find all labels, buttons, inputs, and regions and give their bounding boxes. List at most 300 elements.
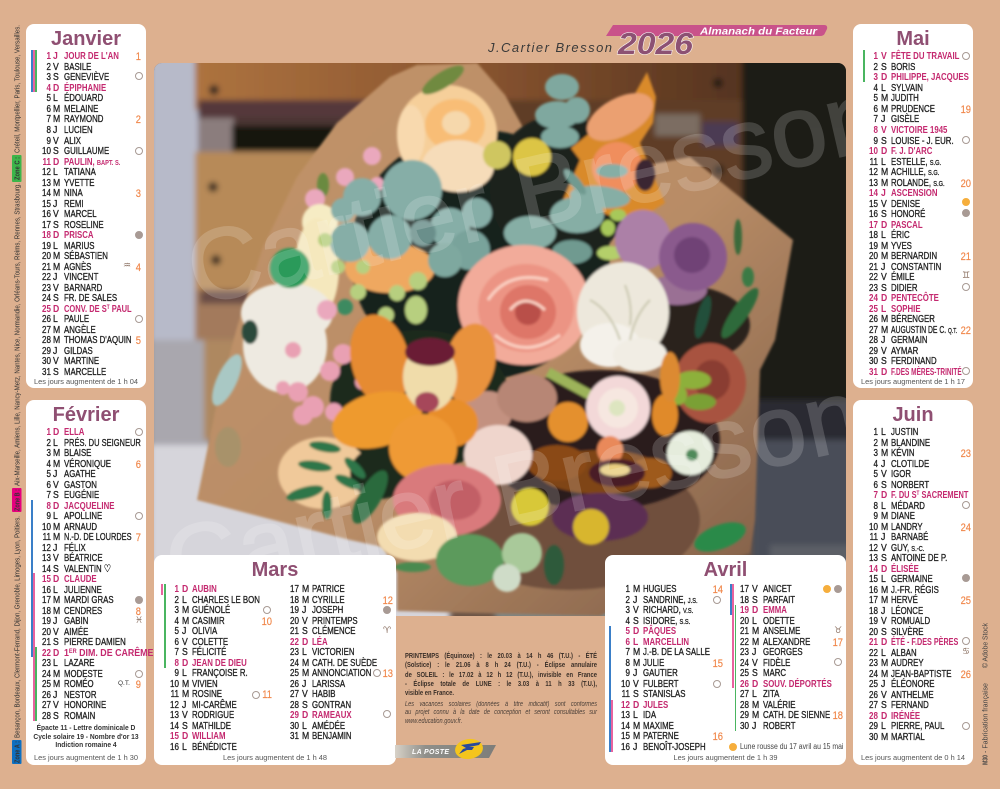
day list: Juin: NORBERT bbox=[891, 480, 929, 491]
day list: Février: ARNAUD bbox=[64, 522, 97, 533]
day list: Janvier: AGNÈS bbox=[64, 262, 91, 273]
day list: Février: M bbox=[53, 532, 60, 543]
day list: Juin: 23 bbox=[961, 448, 971, 460]
day list: Mars first column: 1 bbox=[175, 584, 179, 595]
day list: Avril second column: M bbox=[752, 637, 759, 648]
heading: Juin: Juin bbox=[892, 404, 934, 426]
day list: Février: J bbox=[53, 469, 57, 480]
day list: Février: S bbox=[53, 711, 59, 722]
day list: Avril second column: ANICET bbox=[763, 584, 792, 595]
green stem bbox=[548, 372, 590, 395]
dusty roses bbox=[462, 391, 512, 435]
day list: Mars second column: 12 bbox=[383, 595, 393, 607]
day list: Mars first column: MI-CARÊME bbox=[192, 700, 237, 711]
day list: Avril second column: 19 bbox=[740, 605, 749, 616]
orange lily bbox=[563, 72, 665, 223]
day list: Juin: 24 bbox=[869, 669, 878, 680]
text block: seasons and eclipses: PRINTEMPS (Équinoxe) : le 20.03 à 14 h 46 (T.U.) - ÉTÉ bbox=[404, 651, 596, 660]
day list: Mars first column: M bbox=[182, 689, 189, 700]
icon: new moon bbox=[135, 231, 143, 239]
purple low bbox=[552, 493, 648, 541]
day list: Mai: 15 bbox=[869, 199, 878, 210]
day list: Février: L bbox=[53, 585, 58, 596]
day list: Mai: 23 bbox=[869, 283, 878, 294]
almanac facts: Cycle solaire 19 - Nombre d'or 13 bbox=[33, 732, 139, 741]
day list: Juin: 10 bbox=[869, 522, 878, 533]
day list: Février: M bbox=[53, 522, 60, 533]
day list: Avril second column: J bbox=[752, 721, 756, 732]
green buds bbox=[318, 233, 427, 324]
day list: Février: J bbox=[53, 616, 57, 627]
day list: Mai: FERDINAND bbox=[891, 356, 937, 367]
day list: Juin: M bbox=[881, 669, 888, 680]
day list: Mars second column: 24 bbox=[290, 658, 299, 669]
day list: Février: M bbox=[53, 459, 60, 470]
day list: Avril second column bbox=[740, 584, 843, 732]
day list: Juin: V bbox=[881, 469, 887, 480]
day list: Mai: BORIS bbox=[891, 62, 915, 73]
day list: Janvier: NINA bbox=[64, 188, 82, 199]
day list: Mai: J bbox=[881, 335, 885, 346]
icon: new moon bbox=[834, 585, 842, 593]
day list: Mars first column: V bbox=[182, 710, 188, 721]
day list: Février: V bbox=[53, 553, 59, 564]
day list: Mai bbox=[869, 50, 971, 378]
day list: Mars first column: 9 bbox=[175, 668, 179, 679]
day list: Février: J bbox=[53, 543, 57, 554]
holiday bar bbox=[863, 50, 864, 82]
day list: Mai: M bbox=[881, 314, 888, 325]
purple rose bbox=[615, 210, 671, 270]
day list: Janvier: PRISCA bbox=[64, 230, 93, 241]
day list: Mars second column: LÉA bbox=[312, 637, 328, 648]
day list: Mars second column: 19 bbox=[290, 605, 299, 616]
day list: Avril first column: J bbox=[633, 742, 637, 753]
day list: Février: ROMÉO bbox=[64, 679, 93, 690]
day list: Janvier: V bbox=[53, 62, 59, 73]
day list: Mai: 1 bbox=[874, 51, 878, 62]
day list: Janvier: D bbox=[53, 304, 59, 315]
day list: Février: ROMAIN bbox=[64, 711, 95, 722]
day list: Mars first column: JEAN DE DIEU bbox=[192, 658, 247, 669]
green cluster lower bbox=[436, 534, 504, 586]
legend: red moon bbox=[729, 742, 843, 751]
day list: Mars first column: S bbox=[182, 647, 188, 658]
day list: Mars second column: L bbox=[302, 647, 307, 658]
day list: Février: 7 bbox=[136, 532, 141, 544]
day list: Février: S bbox=[53, 564, 59, 575]
day list: Mai: M bbox=[881, 178, 888, 189]
day list: Mars second column: S bbox=[302, 626, 308, 637]
day list: Janvier: SÉBASTIEN bbox=[64, 251, 107, 262]
day list: Janvier: THOMAS D'AQUIN bbox=[64, 335, 131, 346]
day list: Mars second column: AMÉDÉE bbox=[312, 721, 345, 732]
day list: Février: 11 bbox=[42, 532, 50, 543]
day list: Février: JULIENNE bbox=[64, 585, 101, 596]
day list: Avril second column: SOUV. DÉPORTÉS bbox=[763, 679, 832, 690]
day list: Février: 6 bbox=[136, 459, 141, 471]
day list: Avril second column: D bbox=[752, 679, 758, 690]
day list: Mai: SOPHIE bbox=[891, 304, 921, 315]
day list: Mai: L bbox=[881, 83, 886, 94]
day list: Mars second column: 17 bbox=[290, 584, 299, 595]
day list: Mai: 20 bbox=[869, 251, 878, 262]
day list: Janvier: S bbox=[53, 72, 59, 83]
day list: Janvier: BASILE bbox=[64, 62, 91, 73]
day list: Juin: JEAN-BAPTISTE bbox=[891, 669, 951, 680]
icon: moon bbox=[135, 670, 143, 678]
day list: Juin: 27 bbox=[869, 700, 878, 711]
day list: Juin: JUSTIN bbox=[891, 427, 918, 438]
day list: Avril second column: 28 bbox=[740, 700, 749, 711]
day list: Mars first column bbox=[170, 584, 272, 753]
day list: Janvier: J bbox=[53, 346, 57, 357]
day list: Janvier: S bbox=[53, 146, 59, 157]
heading: Janvier: Janvier bbox=[51, 28, 121, 50]
day list: Mars second column: CYRILLE bbox=[312, 595, 345, 606]
day list: Janvier: 16 bbox=[42, 209, 50, 220]
day list: Mars second column: D bbox=[302, 637, 308, 648]
left white flowers bbox=[302, 204, 338, 240]
day list: Avril first column: 5 bbox=[626, 626, 630, 637]
day list: Mars first column: BÉNÉDICTE bbox=[192, 742, 237, 753]
day list: Mai: YVES bbox=[891, 241, 912, 252]
day list: Mars second column: 13 bbox=[383, 668, 393, 680]
icon: moon bbox=[713, 680, 721, 688]
day list: Mars first column: GUÉNOLÉ bbox=[192, 605, 230, 616]
banner ribbon bbox=[606, 25, 827, 38]
day list: Avril second column: 18 bbox=[833, 710, 843, 722]
day list: Juin: GUY, S.-C. bbox=[891, 543, 924, 554]
day list: Avril first column: PATERNE bbox=[643, 731, 679, 742]
day list: Juin: V bbox=[881, 690, 887, 701]
day list: Avril first column: 11 bbox=[622, 689, 630, 700]
day list: Mai: M bbox=[881, 241, 888, 252]
orange petals right bbox=[548, 402, 588, 442]
day list: Mai: S bbox=[881, 62, 887, 73]
day list: Avril second column: 27 bbox=[740, 689, 749, 700]
day list: Janvier: 24 bbox=[42, 293, 50, 304]
day list: Avril first column: JULES bbox=[643, 700, 668, 711]
day list: Mars first column: 12 bbox=[170, 700, 179, 711]
side text: school holiday zones: Zone A : bbox=[12, 741, 22, 763]
icon: zodiac: ♋ bbox=[962, 647, 970, 657]
day list: Mars first column: M bbox=[182, 679, 189, 690]
day list: Janvier: D bbox=[53, 157, 59, 168]
day list: Février: L bbox=[53, 658, 58, 669]
day list: Mars second column: HABIB bbox=[312, 689, 335, 700]
day list: Juin: 1 bbox=[874, 427, 878, 438]
icon: red moon dot bbox=[823, 585, 831, 593]
day list: Janvier: 3 bbox=[136, 188, 141, 200]
day list: Avril first column: 14 bbox=[621, 721, 630, 732]
day list: Février: V bbox=[53, 480, 59, 491]
day list: Juin: F. DU ST SACREMENT bbox=[891, 490, 968, 501]
green top leaf bbox=[421, 64, 465, 96]
day list: Mars first column: J bbox=[182, 700, 186, 711]
day list: Juin: MÉDARD bbox=[891, 501, 925, 512]
day list: Mai: ROLANDE, S.G. bbox=[891, 178, 945, 189]
day list: Mai: S bbox=[881, 356, 887, 367]
day list: Juin: 9 bbox=[874, 511, 878, 522]
icon: moon bbox=[713, 596, 721, 604]
watermark bbox=[192, 100, 846, 550]
day list: Mai: GERMAIN bbox=[891, 335, 928, 346]
small leaf on paper bbox=[692, 520, 748, 554]
day list: Février: PRÉS. DU SEIGNEUR bbox=[64, 438, 140, 449]
day list: Mars first column: D bbox=[182, 584, 188, 595]
day list: Mars second column: 27 bbox=[290, 689, 299, 700]
day list: Janvier: V bbox=[53, 136, 59, 147]
day list: Juin: PIERRE, PAUL bbox=[891, 721, 944, 732]
day list: Mai: AYMAR bbox=[891, 346, 918, 357]
side text: credits bbox=[980, 623, 990, 765]
day list: Mars first column: L bbox=[182, 742, 187, 753]
day list: Avril second column: 26 bbox=[740, 679, 749, 690]
footer note: Les jours augmentent de 1 h 04 bbox=[34, 377, 138, 386]
day list: Mars first column: 6 bbox=[175, 637, 179, 648]
day list: Janvier: 5 bbox=[46, 93, 50, 104]
day list: Juin: 6 bbox=[874, 480, 878, 491]
day list: Avril second column: 21 bbox=[740, 626, 749, 637]
day list: Février: L bbox=[53, 438, 58, 449]
day list: Juin: 18 bbox=[869, 606, 878, 617]
day list: Juin: 8 bbox=[874, 501, 878, 512]
day list: Avril first column: FULBERT bbox=[643, 679, 679, 690]
day list: Janvier: J bbox=[53, 125, 57, 136]
day list: Mars first column: 2 bbox=[175, 595, 179, 606]
day list: Février: CLAUDE bbox=[64, 574, 96, 585]
day list: Février: 20 bbox=[42, 627, 50, 638]
day list: Janvier: V bbox=[53, 283, 59, 294]
day list: Mai: M bbox=[881, 167, 888, 178]
day list: Mai: 25 bbox=[869, 304, 878, 315]
day list: Mai: L bbox=[881, 304, 886, 315]
day list: Janvier: D bbox=[53, 83, 59, 94]
day list: Mars first column: WILLIAM bbox=[192, 731, 225, 742]
text block: school holidays note: www.education.gouv.fr. bbox=[404, 718, 462, 725]
day list: Février: L bbox=[53, 511, 58, 522]
day list: Mars first column: M bbox=[182, 605, 189, 616]
text block: seasons and eclipses: de SOLEIL : le 17.02 à 12 h 12 (T.U.), invisible en France bbox=[404, 670, 596, 679]
day list: Février: 23 bbox=[42, 658, 50, 669]
day list: Mars second column: CATH. DE SUÈDE bbox=[312, 658, 377, 669]
day list: Juin: DIANE bbox=[891, 511, 915, 522]
day list: Mai: ÉMILE bbox=[891, 272, 914, 283]
day list: Mars first column: L bbox=[182, 668, 187, 679]
day list: Juin: J bbox=[881, 679, 885, 690]
day list: Mai: ÉRIC bbox=[891, 230, 910, 241]
day list: Mars second column: M bbox=[302, 658, 309, 669]
day list: Mai: PHILIPPE, JACQUES bbox=[891, 72, 969, 83]
day list: Juin: IGOR bbox=[891, 469, 911, 480]
icon: new moon bbox=[135, 596, 143, 604]
day list: Février: PIERRE DAMIEN bbox=[64, 637, 125, 648]
day list: Février: 28 bbox=[42, 711, 50, 722]
day list: Avril second column: PARFAIT bbox=[763, 595, 795, 606]
day list: Janvier: TATIANA bbox=[64, 167, 95, 178]
day list: Avril second column: ZITA bbox=[763, 689, 779, 700]
day list: Avril second column: L bbox=[752, 616, 757, 627]
day list: Mai: 5 bbox=[874, 93, 878, 104]
day list: Janvier: 22 bbox=[42, 272, 50, 283]
day list: Janvier: L bbox=[53, 167, 58, 178]
day list: Janvier: 17 bbox=[42, 220, 50, 231]
day list: Février: 27 bbox=[42, 700, 50, 711]
day list: Avril first column: MARCELLIN bbox=[643, 637, 689, 648]
day list: Janvier: PAULE bbox=[64, 314, 89, 325]
day list: Février: 4 bbox=[46, 459, 50, 470]
day list: Février: V bbox=[53, 627, 59, 638]
icon: new moon bbox=[962, 209, 970, 217]
banner ribbon: Almanach du Facteur bbox=[699, 26, 818, 38]
day list: Mars second column bbox=[290, 584, 393, 742]
heading: Février: Février bbox=[53, 404, 119, 426]
day list: Janvier: M bbox=[53, 104, 60, 115]
day list: Mai: V bbox=[881, 125, 887, 136]
day list: Mars second column: M bbox=[302, 584, 309, 595]
day list: Avril second column: M bbox=[752, 700, 759, 711]
day list: Avril first column: 7 bbox=[626, 647, 630, 658]
day list: Avril first column: MAXIME bbox=[643, 721, 674, 732]
day list: Avril first column: 12 bbox=[621, 700, 630, 711]
icon: moon bbox=[135, 512, 143, 520]
day list: Mai: CONSTANTIN bbox=[891, 262, 941, 273]
day list: Mars second column: V bbox=[302, 616, 308, 627]
balls top bbox=[483, 141, 511, 169]
day list: Avril first column: 15 bbox=[713, 658, 723, 670]
logo: La Poste bbox=[395, 738, 496, 760]
header: brand and almanac banner bbox=[487, 25, 828, 61]
icon: zodiac: ♈ bbox=[383, 626, 391, 636]
day list: Avril second column: ANSELME bbox=[763, 626, 800, 637]
day list: Juin: 29 bbox=[869, 721, 878, 732]
day list: Juin: M bbox=[881, 658, 888, 669]
day list: Janvier: MARIUS bbox=[64, 241, 94, 252]
day list: Février: S bbox=[53, 490, 59, 501]
peach rose bbox=[404, 84, 500, 164]
day list: Mars second column: PATRICE bbox=[312, 584, 345, 595]
day list: Février: 1 bbox=[46, 427, 50, 438]
holiday bars bbox=[31, 500, 37, 721]
icon: new moon bbox=[962, 574, 970, 582]
day list: Juin: ANTHELME bbox=[891, 690, 934, 701]
day list: Mai: D bbox=[881, 72, 887, 83]
day list: Février: 21 bbox=[42, 637, 50, 648]
day list: Janvier: 7 bbox=[46, 114, 50, 125]
day list: Avril second column: 20 bbox=[740, 616, 749, 627]
icon: zodiac: ♒ bbox=[123, 261, 131, 271]
side text: school holiday zones: Zone B : bbox=[12, 489, 22, 511]
day list: Janvier: JOUR DE L'AN bbox=[64, 51, 118, 62]
day list: Mars first column: 10 bbox=[170, 679, 179, 690]
day list: Mai: LOUISE - J. EUR. bbox=[891, 136, 954, 147]
day list: Avril first column: M bbox=[633, 658, 640, 669]
day list: Mars second column: LARISSA bbox=[312, 679, 345, 690]
day list: Janvier: M bbox=[53, 178, 60, 189]
day list: Juin: LÉONCE bbox=[891, 606, 923, 617]
day list: Janvier: 30 bbox=[42, 356, 50, 367]
panel: Mai bbox=[853, 24, 973, 388]
day list: Juin: 17 bbox=[869, 595, 878, 606]
day list: Janvier: J bbox=[53, 51, 58, 62]
day list: Avril second column: M bbox=[752, 626, 759, 637]
day list: Mai: L bbox=[881, 230, 886, 241]
holiday bars bbox=[31, 50, 37, 92]
day list: Mars second column: 31 bbox=[290, 731, 299, 742]
orange-red middle bbox=[345, 243, 435, 293]
icon: moon bbox=[962, 722, 970, 730]
day list: Mars first column: V bbox=[182, 637, 188, 648]
day list: Janvier: ANGÈLE bbox=[64, 325, 95, 336]
panel: Février bbox=[26, 400, 146, 765]
day list: Avril second column: D bbox=[752, 605, 758, 616]
icon: moon bbox=[962, 501, 970, 509]
day list: Juin: ÉTÉ - F.DES PÈRES bbox=[891, 637, 958, 648]
day list: Mai: 16 bbox=[869, 209, 878, 220]
day list: Janvier: 26 bbox=[42, 314, 50, 325]
day list: Janvier: REMI bbox=[64, 199, 83, 210]
day list: Février: 12 bbox=[42, 543, 50, 554]
day list: Juin: 20 bbox=[869, 627, 878, 638]
day list: Avril first column: J bbox=[633, 668, 637, 679]
day list: Juin: M bbox=[881, 438, 888, 449]
day list: Juin: 19 bbox=[869, 616, 878, 627]
day list: Avril first column: L bbox=[633, 710, 638, 721]
day list: Février: M bbox=[53, 606, 60, 617]
day list: Juin: L bbox=[881, 648, 886, 659]
day list: Juin: 25 bbox=[869, 679, 878, 690]
day list: Février: 9 bbox=[136, 679, 141, 691]
day list: Avril first column: HUGUES bbox=[643, 584, 676, 595]
day list: Juin: ANTOINE DE P. bbox=[891, 553, 947, 564]
day list: Juin: L bbox=[881, 721, 886, 732]
day list: Mai: V bbox=[881, 272, 887, 283]
day list: Juin: 4 bbox=[874, 459, 878, 470]
day list: Mars first column: 7 bbox=[175, 647, 179, 658]
day list: Juin: S bbox=[881, 553, 887, 564]
day list: Mai: 26 bbox=[869, 314, 878, 325]
icon: moon bbox=[373, 669, 381, 677]
day list: Juin: D bbox=[881, 490, 887, 501]
day list: Mai: M bbox=[881, 325, 888, 336]
watermark: Cartier Bresson bbox=[155, 357, 872, 621]
day list: Janvier: S bbox=[53, 220, 59, 231]
day list: Mars first column: 11 bbox=[262, 689, 272, 701]
day list: Mai: AUGUSTIN DE C. Q.T. bbox=[891, 325, 957, 336]
holiday bars: second column bbox=[730, 584, 736, 731]
day list: Mai: S bbox=[881, 283, 887, 294]
side text: school holiday zones: Besançon, Bordeaux, Clermont-Ferrand, Dijon, Grenoble, Limoges, Lyon, Poitiers. bbox=[12, 516, 22, 738]
side text: credits: M30 bbox=[980, 755, 990, 765]
day list: Janvier: 4 bbox=[136, 262, 141, 274]
footer note: Les jours augmentent de 1 h 48 bbox=[223, 753, 327, 762]
day list: Mars second column: 23 bbox=[290, 647, 299, 658]
day list: Février: 22 bbox=[42, 648, 50, 659]
day list: Mai: 19 bbox=[869, 241, 878, 252]
text block: school holidays note bbox=[404, 701, 598, 725]
day list: Juin: 28 bbox=[869, 711, 878, 722]
day list: Mai: ACHILLE, S.G. bbox=[891, 167, 939, 178]
year: 2026 bbox=[617, 26, 694, 61]
day list: Février: MODESTE bbox=[64, 669, 102, 680]
day list: Mars first column: S bbox=[182, 721, 188, 732]
small white flower bbox=[667, 431, 713, 475]
day list: Juin: 24 bbox=[961, 522, 971, 534]
almanac facts bbox=[33, 723, 139, 749]
day list: Mai: 30 bbox=[869, 356, 878, 367]
day list: Mars first column: D bbox=[182, 658, 188, 669]
